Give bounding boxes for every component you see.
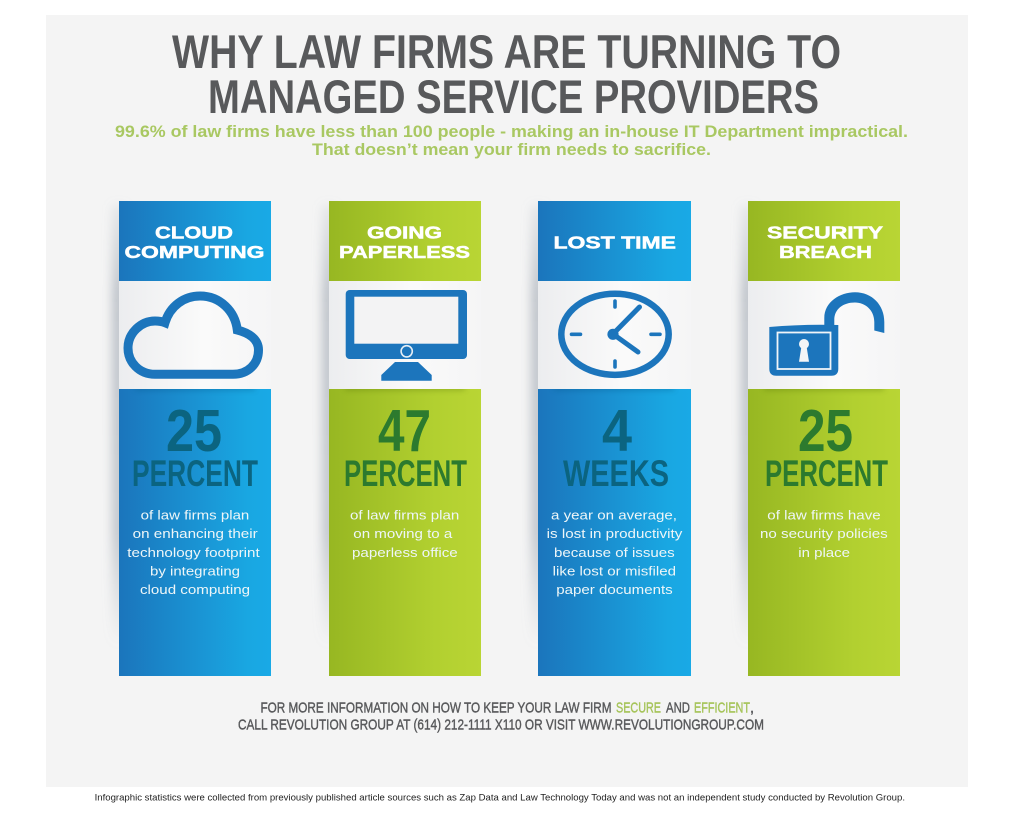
header: cloud computing: CLOUD (155, 222, 233, 242)
stat: 25 percent: PERCENT (132, 453, 258, 494)
stat: 25 percent (765, 398, 888, 494)
panel: cloud computing (112, 201, 271, 676)
header: cloud computing (119, 201, 271, 281)
call to action: FOR MORE INFORMATION ON HOW TO KEEP YOUR LAW FIRM (260, 700, 612, 716)
header: security breach: SECURITY (767, 222, 884, 242)
stat: 25 percent (132, 398, 258, 494)
stat: 4 weeks (563, 398, 669, 494)
panel: lost time (531, 201, 691, 676)
stat: 47 percent: PERCENT (344, 453, 467, 494)
description: paperless office (352, 545, 458, 560)
call to action: EFFICIENT (694, 700, 750, 716)
header: lost time: LOST TIME (554, 232, 676, 252)
subtitle (115, 122, 908, 159)
description: like lost or misfiled (553, 564, 676, 578)
header: going paperless: GOING (367, 222, 442, 242)
title (172, 25, 841, 123)
call to action (238, 700, 764, 734)
description: on moving to a (353, 526, 453, 541)
stat: 4 weeks: WEEKS (563, 453, 669, 494)
description (350, 508, 459, 560)
subtitle: That doesn’t mean your firm needs to sacrifice. (312, 140, 711, 159)
icon: clock (561, 294, 669, 375)
header: going paperless: PAPERLESS (339, 242, 470, 262)
call to action: CALL REVOLUTION GROUP AT (614) 212-1111 X110 OR VISIT WWW.REVOLUTIONGROUP.COM (238, 718, 764, 734)
description: of law firms have (767, 508, 881, 522)
description: technology footprint (127, 545, 260, 560)
source note: Infographic statistics were collected from previously published article sources such as Zap Data and Law Technology Today and was not an independent study conducted by Revolution Group. (95, 792, 905, 804)
stat: 25 percent: PERCENT (765, 453, 888, 494)
description: cloud computing (140, 582, 250, 597)
panel: security breach (741, 201, 900, 676)
subtitle: 99.6% of law firms have less than 100 people - making an in-house IT Department impractical. (115, 122, 908, 141)
description: by integrating (150, 564, 240, 578)
header: security breach: BREACH (779, 242, 872, 262)
icon: cloud (128, 296, 258, 374)
call to action: , (750, 700, 754, 716)
description: of law firms plan (141, 508, 249, 522)
header: cloud computing: COMPUTING (124, 242, 264, 262)
stat: 4 weeks: 4 (602, 398, 632, 464)
description: paper documents (556, 582, 673, 597)
title: WHY LAW FIRMS ARE TURNING TO (172, 25, 841, 78)
header: security breach (748, 201, 900, 281)
stat: 47 percent (344, 398, 467, 494)
description: no security policies (760, 526, 888, 541)
panel: going paperless (322, 201, 481, 676)
description: in place (798, 545, 850, 560)
stat: 47 percent: 47 (378, 398, 431, 464)
stat: 25 percent: 25 (798, 398, 853, 464)
header: going paperless (329, 201, 481, 281)
title: MANAGED SERVICE PROVIDERS (208, 70, 819, 123)
description: of law firms plan (350, 508, 459, 522)
call to action: AND (666, 700, 690, 716)
description (547, 508, 683, 597)
description: a year on average, (551, 508, 677, 522)
description: is lost in productivity (547, 526, 683, 541)
call to action: SECURE (616, 700, 661, 716)
description: because of issues (554, 545, 675, 560)
stat: 25 percent: 25 (166, 398, 222, 464)
description (127, 508, 260, 597)
header: lost time (538, 201, 691, 281)
description: on enhancing their (133, 526, 258, 541)
description (760, 508, 888, 560)
icon: monitor (346, 290, 467, 381)
icon: open padlock (769, 292, 884, 376)
